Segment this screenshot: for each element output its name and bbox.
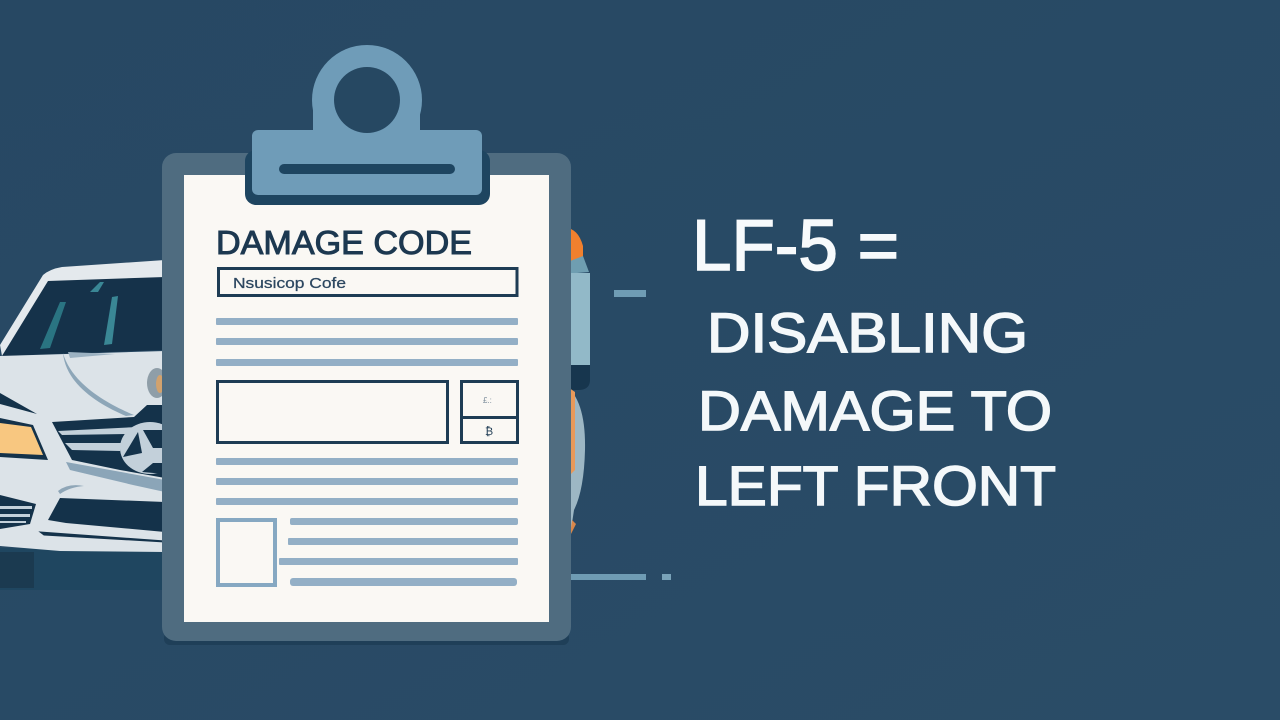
curved body bbox=[565, 385, 585, 530]
text lines upper bbox=[216, 318, 518, 366]
car badge bbox=[147, 368, 162, 398]
object behind clipboard, right side bbox=[565, 228, 590, 536]
form heading: DAMAGE CODE bbox=[216, 225, 472, 262]
description line 3: LEFT FRONT bbox=[695, 454, 1056, 517]
small boxes: ₿ bbox=[485, 426, 493, 438]
connector dashes bbox=[565, 290, 671, 580]
large input box bbox=[218, 382, 448, 442]
text lines middle bbox=[216, 458, 518, 505]
dark base bbox=[565, 365, 590, 390]
car roof bbox=[0, 260, 165, 356]
orange tip bbox=[565, 228, 583, 263]
small boxes: £.: bbox=[483, 396, 492, 405]
car grille bbox=[52, 405, 162, 492]
headline code: LF-5 = bbox=[692, 206, 899, 286]
image placeholder bbox=[218, 520, 275, 585]
car lower intake bbox=[40, 485, 165, 542]
clip bbox=[245, 45, 490, 205]
description line 2: DAMAGE TO bbox=[698, 379, 1052, 442]
light panel bbox=[565, 273, 590, 365]
car body bbox=[0, 351, 165, 552]
clipboard shadow bbox=[164, 632, 569, 645]
clipboard bbox=[162, 45, 571, 645]
code field bbox=[218, 268, 517, 296]
text lines lower bbox=[279, 518, 518, 586]
paper sheet bbox=[184, 175, 549, 622]
car fog lamp bbox=[0, 495, 36, 529]
car illustration bbox=[0, 260, 180, 590]
car lower bumper and tyres bbox=[0, 548, 165, 590]
car headlight bbox=[0, 393, 48, 460]
small boxes bbox=[460, 382, 518, 442]
clipboard board bbox=[162, 153, 571, 641]
car windshield bbox=[2, 277, 165, 356]
description line 1: DISABLING bbox=[707, 301, 1028, 364]
code field: Nsusicop Cofe bbox=[233, 275, 346, 292]
hood crease bbox=[63, 353, 134, 416]
